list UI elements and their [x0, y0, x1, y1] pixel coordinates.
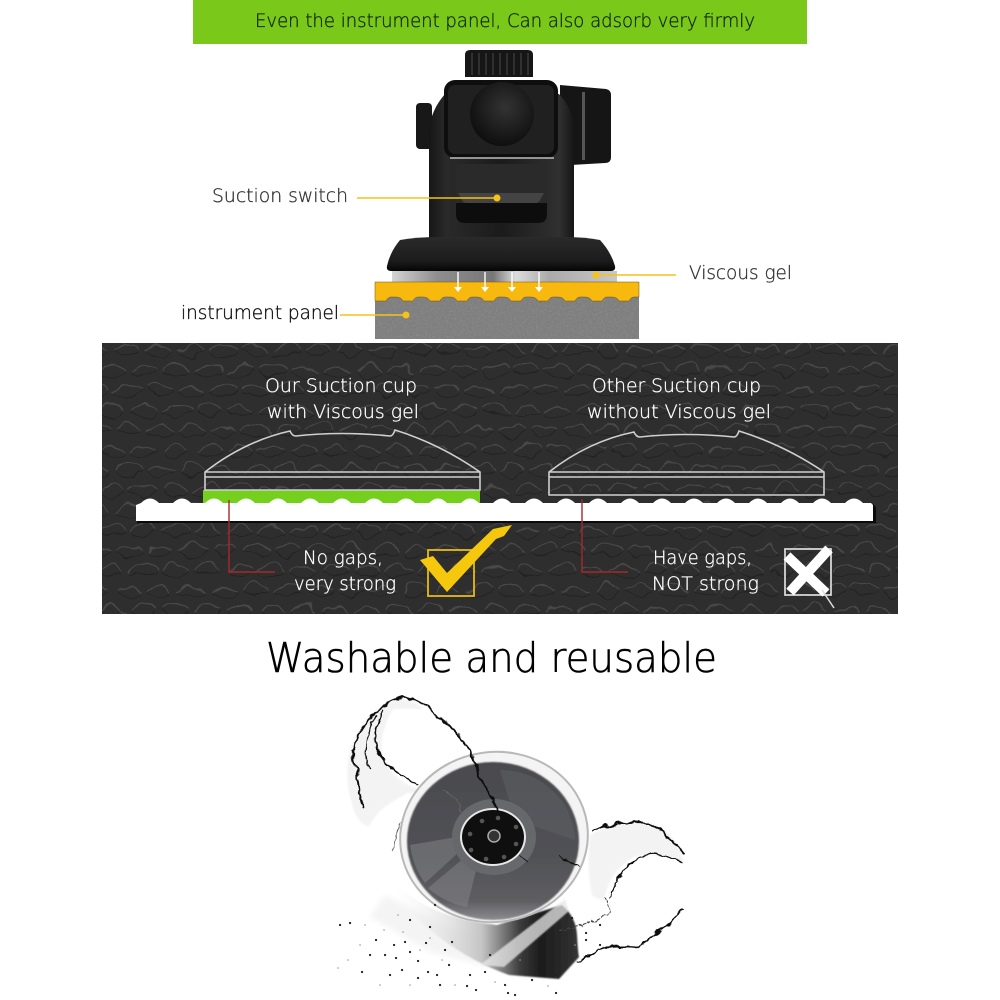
disc — [389, 740, 599, 934]
green gel — [203, 490, 480, 504]
callout: suction switch: Suction switch — [212, 185, 348, 207]
diagram: cup without gel — [549, 431, 824, 495]
label: have gaps: Have gaps, — [653, 547, 752, 569]
yellow viscous gel layer — [375, 282, 639, 301]
label: have gaps — [652, 547, 759, 595]
red pointer: have gaps — [582, 499, 628, 572]
diagram: cup with gel — [203, 430, 480, 504]
panel: suction cup comparison — [82, 323, 918, 634]
label: no gaps: very strong — [294, 573, 396, 595]
icon: side knob — [416, 103, 432, 149]
water sheets — [347, 700, 684, 901]
silver gel ring — [392, 271, 617, 282]
dust fade — [370, 895, 530, 972]
heading: our suction cup: Our Suction cup — [265, 375, 417, 397]
icon: top knob — [465, 50, 533, 77]
cup outline — [205, 430, 480, 490]
water streams — [352, 698, 683, 963]
callout: suction switch — [212, 185, 500, 207]
white textured surface — [136, 498, 876, 523]
banner text: Even the instrument panel, Can also adsorb very firmly — [255, 10, 755, 32]
suction switch panel — [456, 164, 547, 223]
splatter droplets — [340, 905, 600, 995]
arrows pressing down — [454, 272, 543, 292]
heading: other suction cup: Other Suction cup — [592, 375, 761, 397]
icon: yellow check in box — [420, 525, 512, 596]
mount body — [429, 94, 574, 240]
label: no gaps — [294, 547, 396, 595]
stem under disc — [385, 884, 579, 979]
callout: viscous gel — [592, 262, 792, 284]
heading: other suction cup: without Viscous gel — [587, 401, 771, 423]
photo: suction disc with water splash — [338, 698, 684, 995]
heading: our suction cup — [265, 375, 419, 423]
callout: viscous gel: Viscous gel — [689, 262, 792, 284]
head with ball — [444, 80, 558, 158]
label: no gaps: No gaps, — [303, 547, 383, 569]
banner: green heading bar — [193, 0, 807, 44]
suction base — [387, 237, 615, 271]
icon: white cross in box — [785, 549, 834, 608]
callout: instrument panel: instrument panel — [181, 302, 339, 324]
heading: our suction cup: with Viscous gel — [267, 401, 419, 423]
red pointer: no gaps — [229, 500, 275, 572]
title: washable and reusable: Washable and reusable — [266, 634, 717, 682]
instrument panel surface — [375, 296, 639, 339]
icon: right tab — [560, 85, 611, 165]
heading: other suction cup — [587, 375, 771, 423]
product diagram: suction mount on instrument panel — [375, 50, 639, 339]
label: have gaps: NOT strong — [652, 573, 759, 595]
